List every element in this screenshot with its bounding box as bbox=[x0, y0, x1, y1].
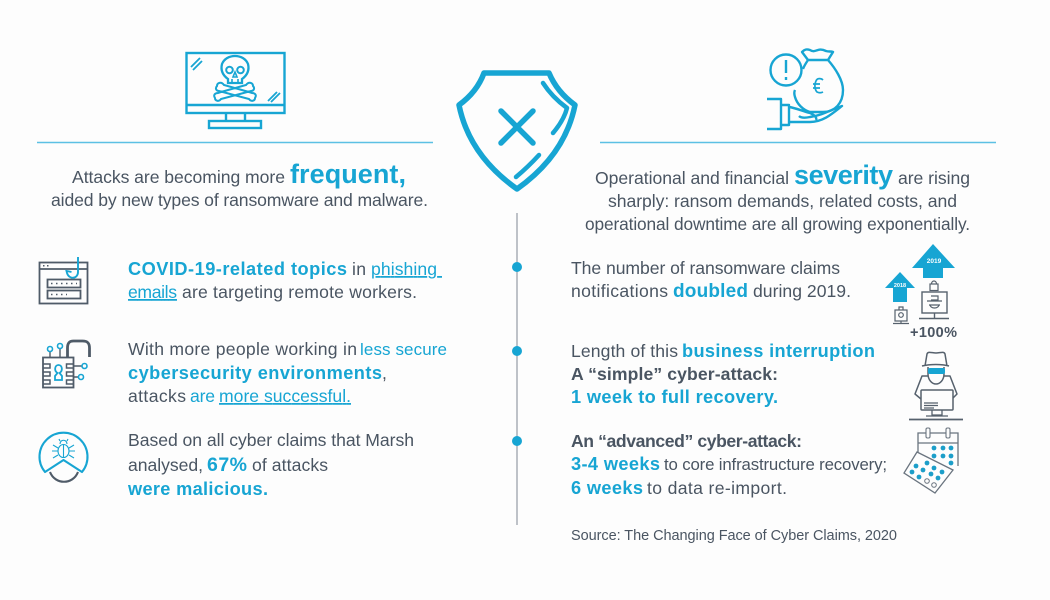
heading: severity bbox=[585, 160, 970, 234]
text: less secure environments bbox=[128, 339, 447, 406]
text: malicious attacks: analysed, bbox=[128, 455, 203, 475]
text: business interruption simple attack: Length of this bbox=[571, 341, 678, 361]
heading: severity: operational downtime are all growing exponentially. bbox=[585, 214, 970, 234]
source note: Source: The Changing Face of Cyber Claims, 2020 bbox=[571, 528, 897, 544]
text: advanced attack: to core infrastructure recovery; bbox=[664, 455, 887, 474]
text: advanced attack: to data re-import. bbox=[647, 478, 787, 498]
text: claims doubled: doubled bbox=[673, 281, 748, 302]
heading: severity: Operational and financial bbox=[595, 168, 789, 188]
text: covid phishing: are targeting remote workers. bbox=[182, 282, 417, 302]
text: business interruption simple attack: business interruption bbox=[682, 341, 875, 361]
text: malicious attacks: of attacks bbox=[252, 455, 328, 475]
text: less secure environments: less secure bbox=[360, 340, 447, 359]
text: advanced attack bbox=[571, 431, 887, 498]
text: claims doubled: The number of ransomware claims bbox=[571, 258, 840, 278]
text: less secure environments: , bbox=[382, 363, 387, 383]
icon: phishing browser window bbox=[40, 257, 88, 304]
text: covid phishing: emails bbox=[128, 282, 177, 302]
heading: frequent attacks: Attacks are becoming more bbox=[72, 167, 285, 187]
text: less secure environments: cybersecurity environments bbox=[128, 363, 382, 383]
icon: open padlock circuit bbox=[43, 341, 90, 388]
text: malicious attacks: Based on all cyber claims that Marsh bbox=[128, 430, 414, 450]
text: malicious attacks: were malicious. bbox=[127, 479, 268, 499]
text: covid phishing bbox=[128, 259, 442, 302]
icon: calendars bbox=[904, 428, 958, 493]
text: claims doubled: during 2019. bbox=[753, 281, 851, 301]
text: business interruption simple attack: A “simple” cyber-attack: bbox=[571, 364, 778, 384]
text: advanced attack: An “advanced” cyber-attack: bbox=[571, 431, 802, 451]
heading: severity: sharply: ransom demands, related costs, and bbox=[608, 191, 957, 211]
text: advanced attack: 3-4 weeks bbox=[571, 454, 660, 474]
icon: arrows and computers +100% bbox=[885, 244, 957, 341]
icon: hacker at laptop bbox=[909, 352, 963, 420]
text: malicious attacks bbox=[127, 430, 414, 499]
heading: frequent attacks: frequent, bbox=[290, 159, 406, 189]
text: covid phishing: in bbox=[352, 259, 366, 279]
text: business interruption simple attack: 1 week to full recovery. bbox=[571, 387, 778, 407]
text: less secure environments: more successful. bbox=[219, 386, 351, 406]
text: covid phishing: phishing bbox=[371, 259, 442, 279]
text: claims doubled bbox=[571, 258, 851, 302]
text: less secure environments: With more people working in bbox=[128, 339, 357, 359]
heading: frequent attacks bbox=[51, 159, 428, 210]
text: less secure environments: are bbox=[190, 386, 215, 406]
heading: severity: severity bbox=[794, 160, 893, 190]
text: business interruption simple attack bbox=[571, 341, 875, 407]
icon: arrows and computers +100%: 2019 bbox=[927, 258, 942, 265]
heading: severity: are rising bbox=[898, 168, 970, 188]
icon: hand holding money bag bbox=[767, 49, 843, 129]
text: malicious attacks: 67% bbox=[207, 454, 247, 476]
text: advanced attack: 6 weeks bbox=[571, 478, 643, 498]
heading: frequent attacks: aided by new types of ransomware and malware. bbox=[51, 190, 428, 210]
icon: arrows and computers +100%: +100% bbox=[910, 325, 957, 341]
icon: central shield with cross bbox=[459, 73, 575, 189]
text: less secure environments: attacks bbox=[128, 386, 186, 406]
icon: arrows and computers +100%: 2018 bbox=[894, 283, 906, 289]
icon: monitor with skull bbox=[186, 53, 284, 128]
timeline markers bbox=[512, 262, 522, 446]
text: covid phishing: COVID-19-related topics bbox=[128, 259, 347, 279]
text: claims doubled: notifications bbox=[571, 281, 668, 301]
icon: bug in circle bbox=[40, 433, 88, 482]
